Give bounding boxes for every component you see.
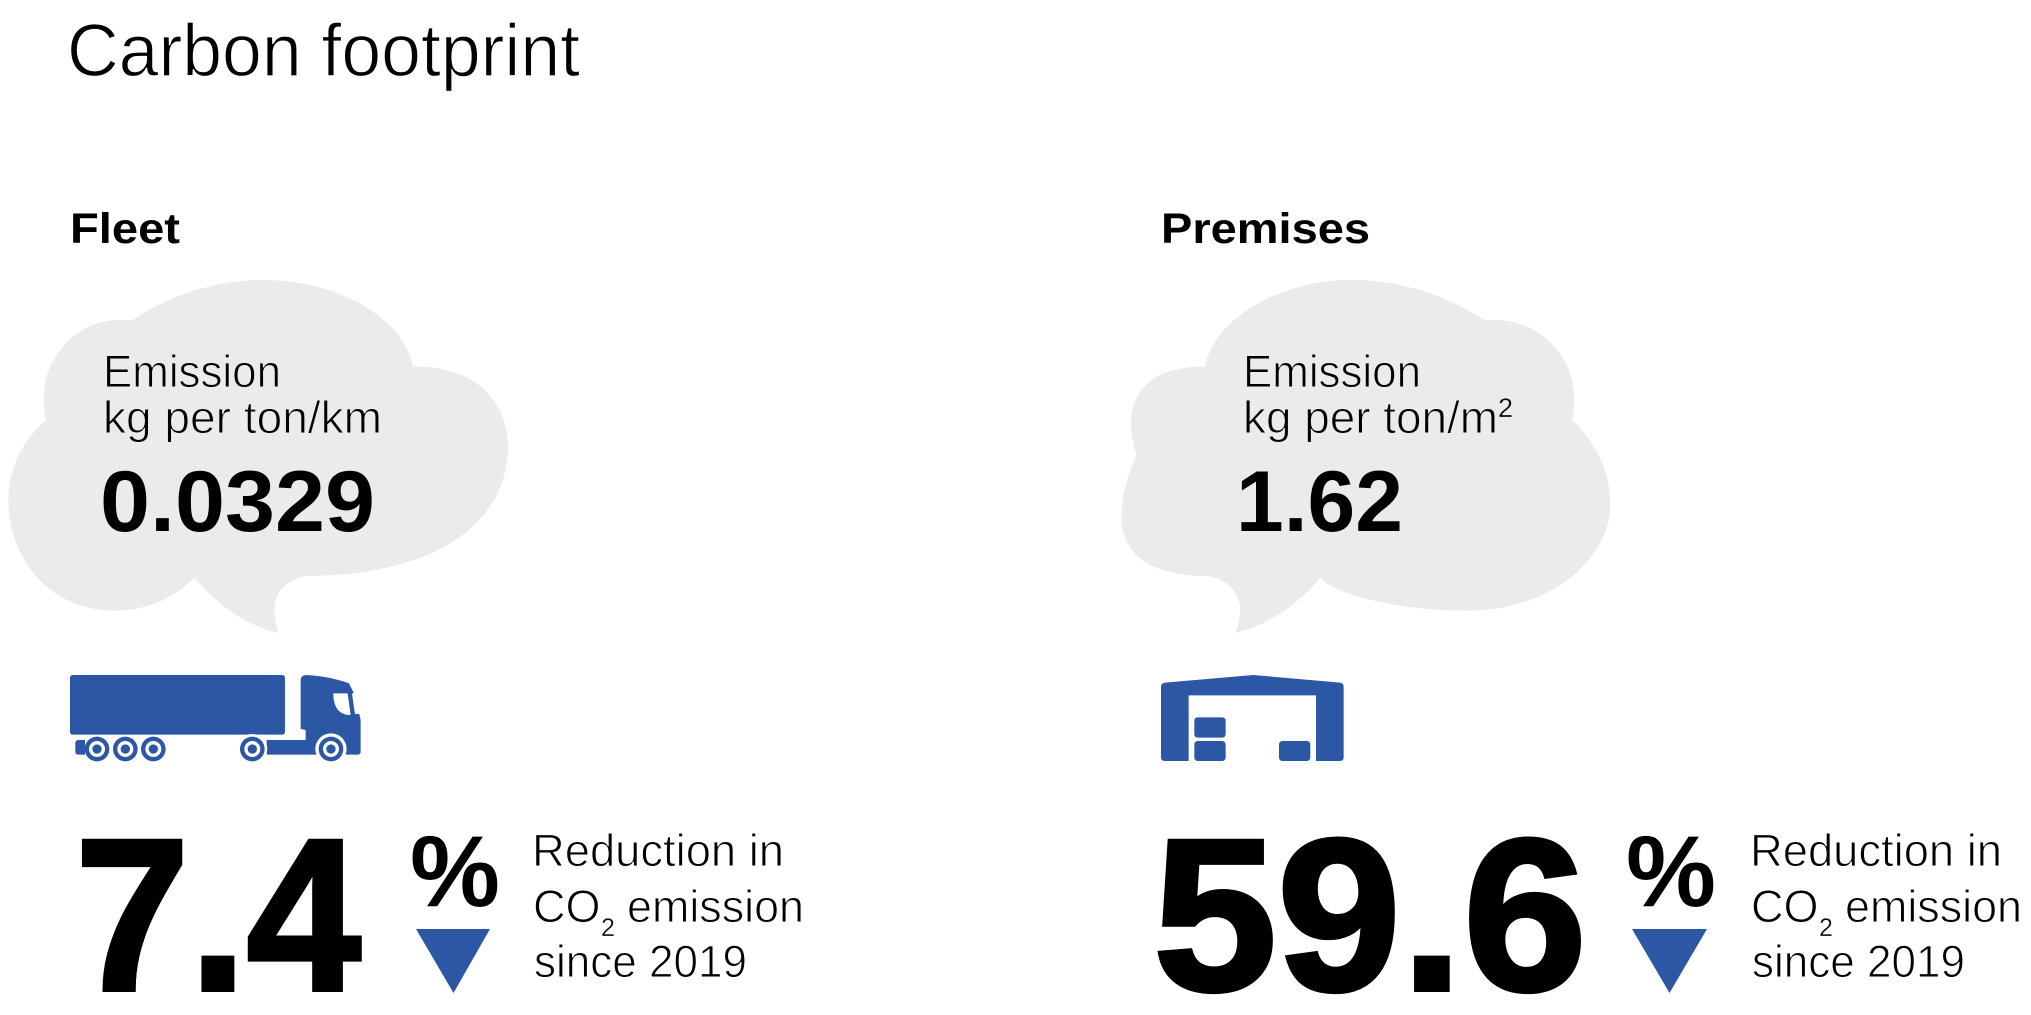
speech cloud: premises emission: 2 xyxy=(1498,393,1513,423)
panel: fleet xyxy=(8,205,804,1015)
icon: down triangle fleet xyxy=(416,929,490,993)
reduction text: fleet: 2 xyxy=(601,914,615,942)
reduction text: fleet xyxy=(532,825,804,987)
reduction text: premises: 2 xyxy=(1819,914,1833,942)
panel: premises xyxy=(1121,205,2022,1015)
speech cloud: fleet emission: kg per ton/km xyxy=(103,392,382,443)
reduction text: fleet: Reduction in xyxy=(532,825,784,876)
speech cloud: fleet emission: Emission xyxy=(103,346,281,397)
speech cloud: fleet emission xyxy=(8,280,508,633)
reduction text: premises: emission xyxy=(1845,881,2022,932)
percent sign: fleet: % xyxy=(410,816,500,928)
heading: premises: Premises xyxy=(1161,205,1370,253)
icon: down triangle premises xyxy=(1632,929,1707,993)
reduction text: premises: Reduction in xyxy=(1750,825,2002,876)
title: Carbon footprint xyxy=(67,9,580,92)
reduction text: fleet: since 2019 xyxy=(534,936,747,987)
reduction text: premises xyxy=(1750,825,2022,987)
percent sign: premises: % xyxy=(1626,816,1716,928)
heading: fleet: Fleet xyxy=(70,205,180,253)
speech cloud: premises emission: kg per ton/m xyxy=(1243,392,1498,443)
reduction text: fleet: CO xyxy=(533,881,600,932)
speech cloud: premises emission: 1.62 xyxy=(1236,454,1403,550)
icon: truck xyxy=(70,675,361,765)
reduction text: fleet: emission xyxy=(627,881,804,932)
reduction text: premises: CO xyxy=(1751,881,1818,932)
speech cloud: premises emission xyxy=(1121,280,1610,633)
reduction text: premises: since 2019 xyxy=(1752,936,1965,987)
icon: warehouse xyxy=(1161,675,1344,761)
speech cloud: fleet emission: 0.0329 xyxy=(100,454,375,550)
speech cloud: premises emission: Emission xyxy=(1243,346,1421,397)
